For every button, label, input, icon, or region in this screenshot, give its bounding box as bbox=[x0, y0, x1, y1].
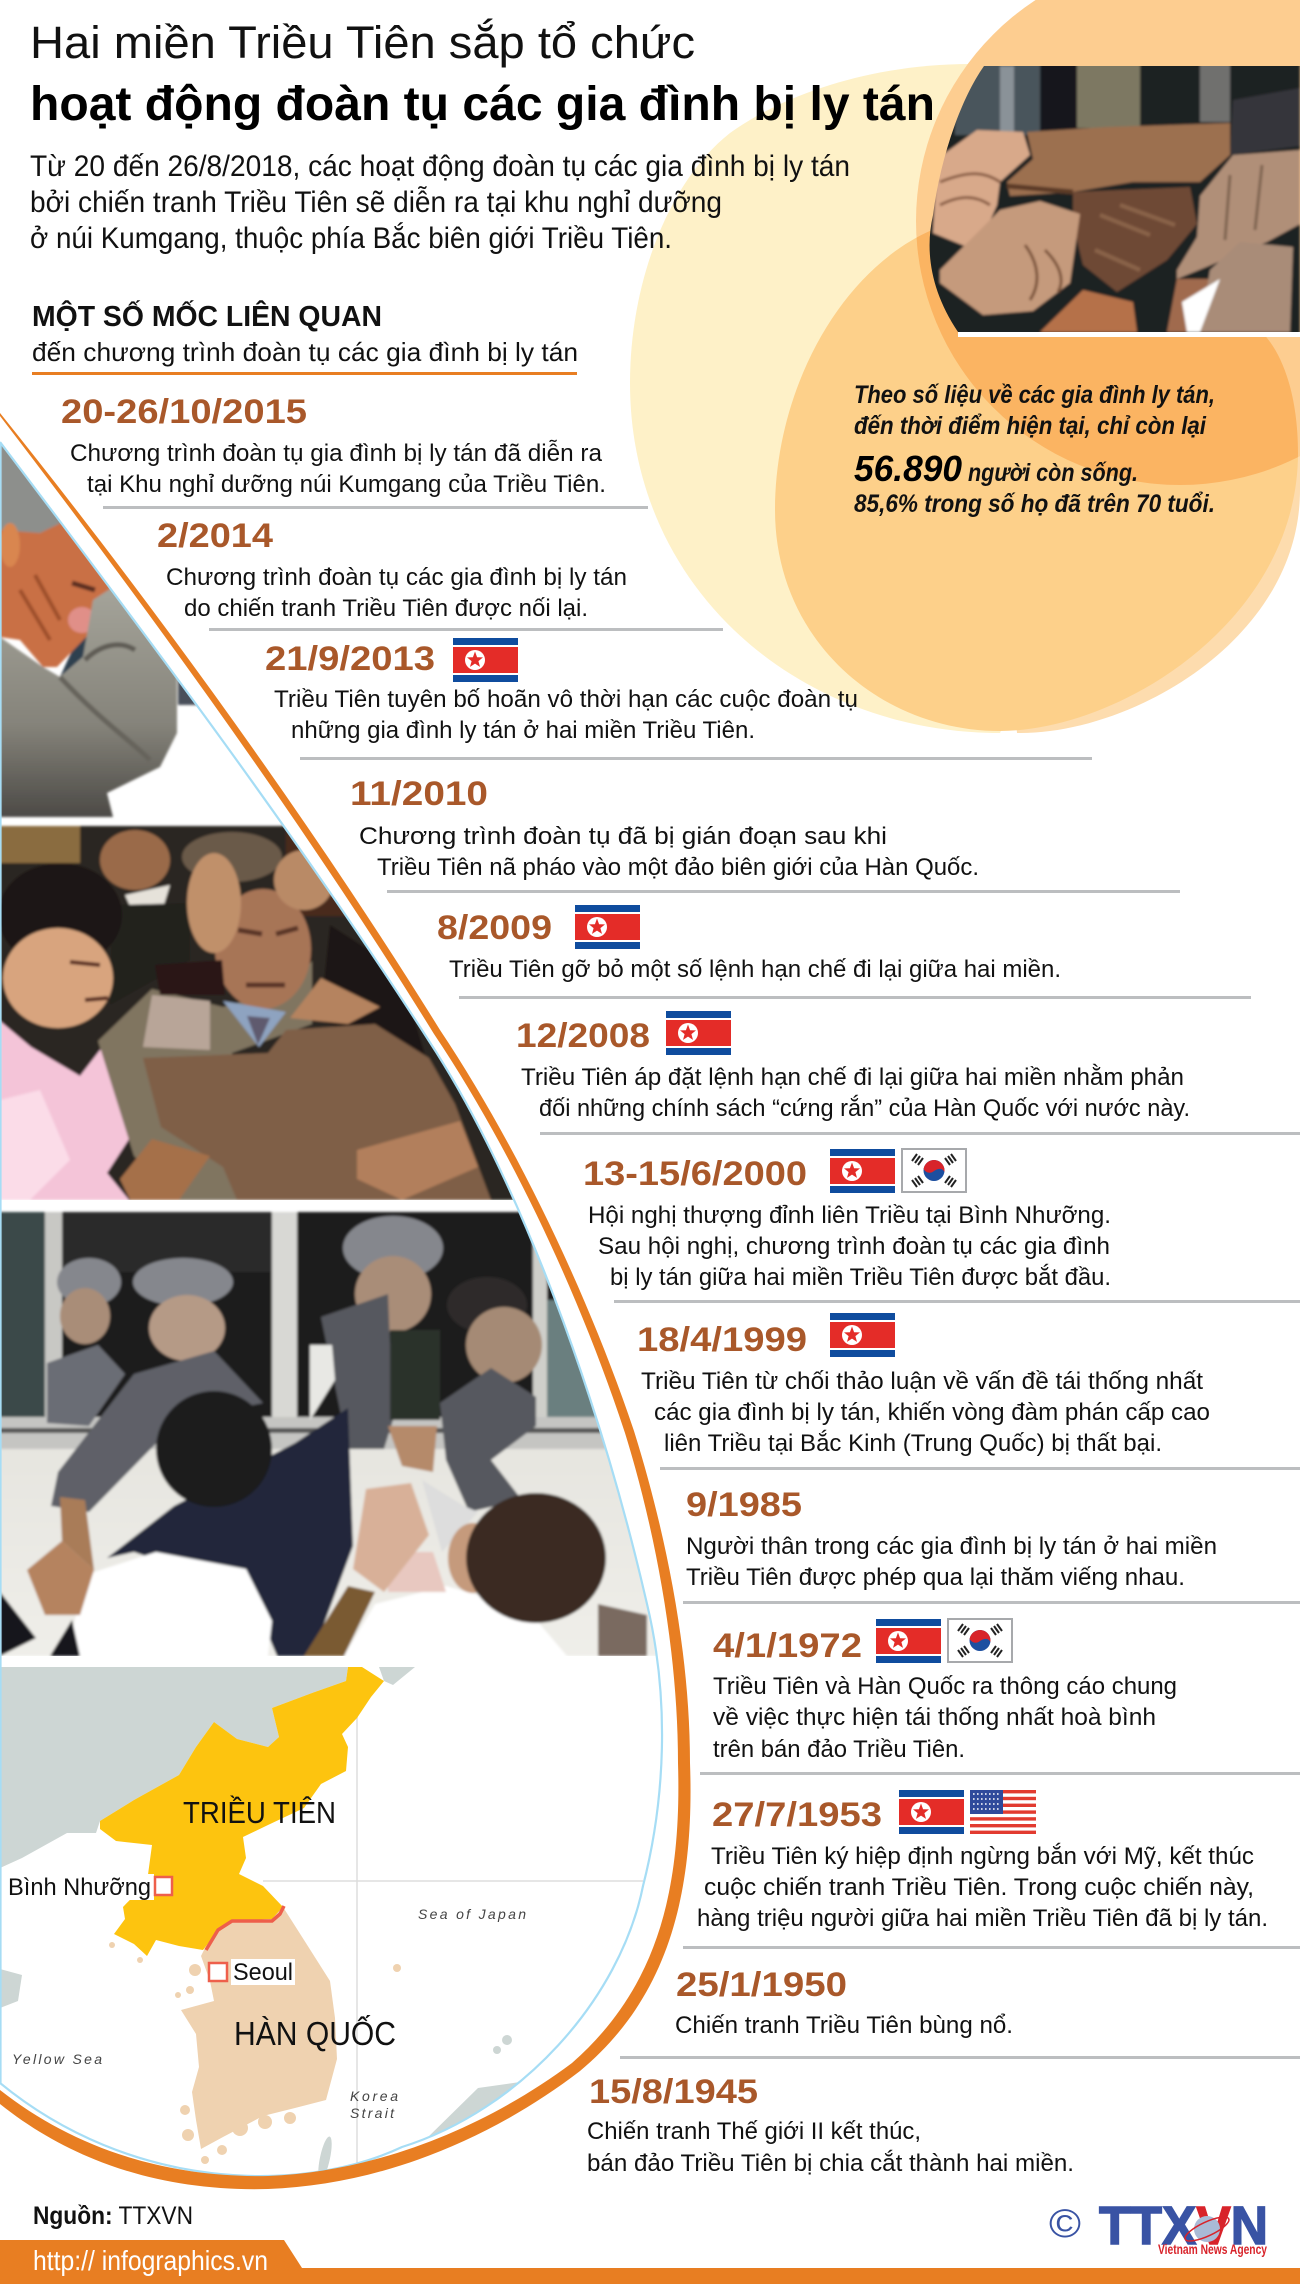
intro paragraph bbox=[30, 150, 850, 255]
left photo column clipped by curve bbox=[0, 440, 700, 2197]
timeline event: 18/4/1999: 18/4/1999 bbox=[637, 1321, 807, 1359]
timeline event: 18/4/1999: liên Triều tại Bắc Kinh (Trung Quốc) bị thất bại. bbox=[664, 1430, 1162, 1457]
timeline event: 15/8/1945 bbox=[587, 2073, 1074, 2177]
map: Seoul marker: Seoul bbox=[233, 1959, 293, 1986]
callout: statistics: 85,6% trong số họ đã trên 70 tuổi. bbox=[854, 490, 1215, 518]
photo gap bbox=[2, 1656, 656, 1658]
map: coastal islands bbox=[109, 1942, 401, 2164]
callout: statistics: người còn sống. bbox=[968, 459, 1138, 487]
timeline event: 2/2014: 2/2014 bbox=[157, 517, 273, 555]
timeline event: 13-15/6/2000: Hội nghị thượng đỉnh liên Triều tại Bình Nhưỡng. bbox=[588, 1202, 1111, 1229]
map: sea labels: Sea of Japan bbox=[418, 1906, 526, 1922]
timeline event: 27/7/1953 bbox=[683, 1790, 1300, 1949]
timeline event: 8/2009: Triều Tiên gỡ bỏ một số lệnh hạn chế đi lại giữa hai miền. bbox=[449, 956, 1061, 983]
logo: TTXVN agency: TTXVN bbox=[1099, 2196, 1268, 2256]
icon: North Korea flag bbox=[575, 905, 640, 949]
source note: Nguồn: TTXVN bbox=[33, 2202, 193, 2230]
map: sea labels: Strait bbox=[350, 2105, 395, 2121]
timeline event: 15/8/1945: Chiến tranh Thế giới II kết thúc, bbox=[587, 2118, 921, 2145]
timeline event: 20-26/10/2015: 20-26/10/2015 bbox=[61, 393, 307, 431]
timeline event: 25/1/1950: Chiến tranh Triều Tiên bùng nổ. bbox=[675, 2012, 1013, 2039]
timeline event: 13-15/6/2000: bị ly tán giữa hai miền Triều Tiên được bắt đầu. bbox=[610, 1264, 1111, 1291]
timeline event: 9/1985: Người thân trong các gia đình bị ly tán ở hai miền bbox=[686, 1533, 1217, 1560]
map: label South Korea: HÀN QUỐC bbox=[234, 2014, 396, 2052]
logo: TTXVN agency: © bbox=[1049, 2202, 1081, 2246]
timeline event: 15/8/1945: bán đảo Triều Tiên bị chia cắt thành hai miền. bbox=[587, 2150, 1074, 2177]
timeline event: 11/2010 bbox=[350, 775, 1180, 893]
icon: South Korea flag bbox=[902, 1149, 966, 1192]
timeline event: 20-26/10/2015: Chương trình đoàn tụ gia đình bị ly tán đã diễn ra bbox=[70, 440, 603, 467]
curve: thin blue line bbox=[0, 442, 662, 2176]
callout: statistics: 56.890 bbox=[854, 448, 962, 489]
icon: North Korea flag bbox=[830, 1149, 895, 1193]
title: Hai miền Triều Tiên sắp tổ chức bbox=[30, 17, 695, 68]
intro paragraph: bởi chiến tranh Triều Tiên sẽ diễn ra tại khu nghỉ dưỡng bbox=[30, 186, 722, 219]
icon: North Korea flag bbox=[453, 638, 518, 682]
timeline event: 25/1/1950 bbox=[620, 1966, 1300, 2059]
timeline event: 4/1/1972: trên bán đảo Triều Tiên. bbox=[713, 1736, 965, 1763]
section heading: đến chương trình đoàn tụ các gia đình bị ly tán bbox=[32, 337, 578, 367]
timeline event: 9/1985: Triều Tiên được phép qua lại thăm viếng nhau. bbox=[686, 1564, 1185, 1591]
map: South Korea bbox=[181, 1907, 337, 2149]
timeline event: 21/9/2013: những gia đình ly tán ở hai miền Triều Tiên. bbox=[291, 717, 755, 744]
footer url: http:// infographics.vn bbox=[33, 2245, 268, 2276]
callout: statistics: đến thời điểm hiện tại, chỉ còn lại bbox=[854, 412, 1207, 440]
timeline event: 21/9/2013: 21/9/2013 bbox=[265, 640, 435, 678]
icon: South Korea flag bbox=[948, 1619, 1012, 1662]
photo gap bbox=[2, 1200, 514, 1202]
timeline event: 27/7/1953: 27/7/1953 bbox=[712, 1796, 882, 1834]
icon: North Korea flag bbox=[876, 1619, 941, 1663]
map: demarcation line bbox=[206, 1906, 284, 1950]
timeline event: 4/1/1972: 4/1/1972 bbox=[713, 1627, 862, 1665]
timeline event: 27/7/1953: Triều Tiên ký hiệp định ngừng bắn với Mỹ, kết thúc bbox=[711, 1843, 1254, 1870]
map: sea labels: Yellow Sea bbox=[12, 2051, 102, 2067]
timeline event: 8/2009: 8/2009 bbox=[437, 909, 552, 947]
timeline event: 13-15/6/2000: Sau hội nghị, chương trình đoàn tụ các gia đình bbox=[598, 1233, 1110, 1260]
timeline event: 9/1985 bbox=[683, 1486, 1300, 1604]
photo caption strip bbox=[958, 332, 1300, 337]
photo: embracing family bbox=[0, 826, 520, 1200]
icon: United States flag bbox=[970, 1790, 1036, 1834]
timeline event: 18/4/1999 bbox=[637, 1313, 1300, 1470]
timeline event: 8/2009 bbox=[437, 905, 1251, 999]
timeline event: 18/4/1999: các gia đình bị ly tán, khiến vòng đàm phán cấp cao bbox=[654, 1399, 1210, 1426]
photo: relatives at the bus window bbox=[0, 1212, 660, 1656]
timeline event: 11/2010: Triều Tiên nã pháo vào một đảo biên giới của Hàn Quốc. bbox=[377, 854, 979, 881]
callout: statistics: Theo số liệu về các gia đình ly tán, bbox=[854, 381, 1215, 409]
decorative circles: background bubbles bbox=[630, 0, 1300, 733]
intro paragraph: Từ 20 đến 26/8/2018, các hoạt động đoàn tụ các gia đình bị ly tán bbox=[30, 150, 850, 183]
timeline event: 20-26/10/2015: tại Khu nghỉ dưỡng núi Kumgang của Triều Tiên. bbox=[87, 471, 606, 498]
title: hoạt động đoàn tụ các gia đình bị ly tán bbox=[30, 78, 935, 131]
map: China land bbox=[0, 1667, 348, 1868]
timeline event: 4/1/1972: về việc thực hiện tái thống nhất hoà bình bbox=[713, 1704, 1156, 1731]
timeline event: 2/2014: do chiến tranh Triều Tiên được nối lại. bbox=[184, 595, 588, 622]
section heading: MỘT SỐ MỐC LIÊN QUAN bbox=[32, 299, 382, 333]
timeline event: 12/2008: đối những chính sách “cứng rắn” của Hàn Quốc với nước này. bbox=[539, 1095, 1190, 1122]
map: North Korea bbox=[100, 1667, 384, 1956]
timeline event: 2/2014 bbox=[157, 517, 723, 631]
map: neighbouring land bbox=[0, 1667, 527, 2181]
timeline event: 4/1/1972: Triều Tiên và Hàn Quốc ra thông cáo chung bbox=[713, 1673, 1177, 1700]
section heading bbox=[32, 299, 578, 375]
timeline event: 25/1/1950: 25/1/1950 bbox=[676, 1966, 847, 2004]
footer band bbox=[0, 2240, 1300, 2284]
timeline event: 21/9/2013: Triều Tiên tuyên bố hoãn vô thời hạn các cuộc đoàn tụ bbox=[274, 686, 858, 713]
icon: North Korea flag bbox=[666, 1011, 731, 1055]
map of the Korean peninsula bbox=[2, 1667, 643, 2170]
map: sea labels: Korea bbox=[350, 2088, 398, 2104]
timeline event: 20-26/10/2015 bbox=[61, 393, 648, 509]
map: label North Korea: TRIỀU TIÊN bbox=[183, 1795, 336, 1830]
title bbox=[30, 17, 935, 131]
photo: crying old man bbox=[0, 440, 203, 817]
timeline event: 2/2014: Chương trình đoàn tụ các gia đình bị ly tán bbox=[166, 564, 627, 591]
timeline event: 11/2010: Chương trình đoàn tụ đã bị gián đoạn sau khi bbox=[359, 823, 887, 850]
timeline event: 12/2008 bbox=[516, 1011, 1300, 1135]
timeline event: 18/4/1999: Triều Tiên từ chối thảo luận về vấn đề tái thống nhất bbox=[641, 1368, 1203, 1395]
timeline event: 27/7/1953: hàng triệu người giữa hai miền Triều Tiên đã bị ly tán. bbox=[697, 1905, 1268, 1932]
map: sea labels bbox=[12, 1906, 526, 2121]
icon: North Korea flag bbox=[899, 1790, 964, 1834]
timeline event: 9/1985: 9/1985 bbox=[686, 1486, 802, 1524]
map: Pyongyang marker: Bình Nhưỡng bbox=[8, 1874, 151, 1901]
timeline event: 27/7/1953: cuộc chiến tranh Triều Tiên. Trong cuộc chiến này, bbox=[704, 1874, 1254, 1901]
timeline event: 15/8/1945: 15/8/1945 bbox=[589, 2073, 758, 2111]
timeline event: 11/2010: 11/2010 bbox=[350, 775, 488, 813]
timeline event: 12/2008: Triều Tiên áp đặt lệnh hạn chế đi lại giữa hai miền nhằm phản bbox=[521, 1064, 1184, 1091]
icon: North Korea flag bbox=[830, 1313, 895, 1357]
timeline event: 21/9/2013 bbox=[265, 638, 1092, 760]
timeline event: 12/2008: 12/2008 bbox=[516, 1017, 650, 1055]
intro paragraph: ở núi Kumgang, thuộc phía Bắc biên giới Triều Tiên. bbox=[30, 222, 672, 255]
timeline event: 13-15/6/2000: 13-15/6/2000 bbox=[583, 1155, 807, 1193]
curve: tapered orange arc bbox=[0, 413, 691, 2189]
photo: clasped hands bbox=[920, 60, 1300, 340]
callout: statistics bbox=[854, 381, 1215, 518]
timeline event: 13-15/6/2000 bbox=[583, 1149, 1300, 1303]
timeline event: 4/1/1972 bbox=[700, 1619, 1300, 1775]
